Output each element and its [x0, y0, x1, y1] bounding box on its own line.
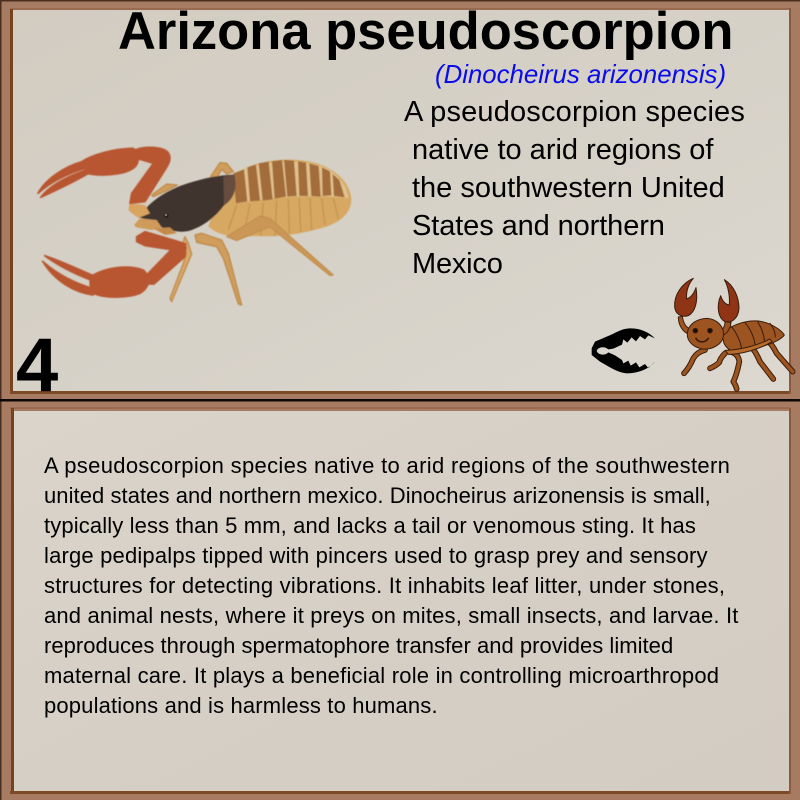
icon: black pincer	[592, 328, 655, 374]
body paragraph: structures for detecting vibrations. It inhabits leaf litter, under stones,	[44, 573, 725, 598]
abdomen ventral ribs	[228, 198, 338, 236]
species description: the southwestern United	[412, 172, 725, 204]
card number: 4	[16, 323, 58, 408]
chelicera	[134, 218, 162, 230]
abdomen	[208, 160, 351, 237]
carapace	[138, 175, 235, 232]
arms	[678, 316, 691, 334]
body paragraph: populations and is harmless to humans.	[44, 693, 438, 718]
legs	[684, 340, 793, 389]
abdomen dorsal plates	[233, 160, 345, 203]
species description: Mexico	[412, 248, 503, 280]
body paragraph: typically less than 5 mm, and lacks a tail or venomous sting. It has	[44, 513, 696, 538]
body paragraph: and animal nests, where it preys on mites, small insects, and larvae. It	[44, 603, 739, 628]
head	[687, 318, 724, 349]
legs	[152, 163, 242, 305]
species description: A pseudoscorpion species	[404, 96, 745, 128]
body paragraph: maternal care. It plays a beneficial role in controlling microarthropod	[44, 663, 719, 688]
upper pedipalp	[129, 203, 150, 218]
body paragraph: large pedipalps tipped with pincers used to grasp prey and sensory	[44, 543, 708, 568]
species description: native to arid regions of	[412, 134, 713, 166]
body paragraph: A pseudoscorpion species native to arid regions of the southwestern	[44, 453, 730, 478]
rear leg	[227, 216, 333, 276]
body paragraph: united states and northern mexico. Dinocheirus arizonensis is small,	[44, 483, 711, 508]
icon: cartoon pseudoscorpion	[674, 278, 796, 392]
scientific name: (Dinocheirus arizonensis)	[435, 61, 726, 89]
species description: States and northern	[412, 210, 665, 242]
body paragraph	[44, 453, 739, 718]
body paragraph: reproduces through spermatophore transfer and provides limited	[44, 633, 673, 658]
abdomen	[722, 321, 784, 352]
illustration: pseudoscorpion photo	[36, 146, 352, 306]
title: Arizona pseudoscorpion	[118, 2, 733, 61]
claws	[675, 278, 697, 316]
species description	[404, 96, 745, 280]
lower pedipalp	[43, 232, 186, 297]
